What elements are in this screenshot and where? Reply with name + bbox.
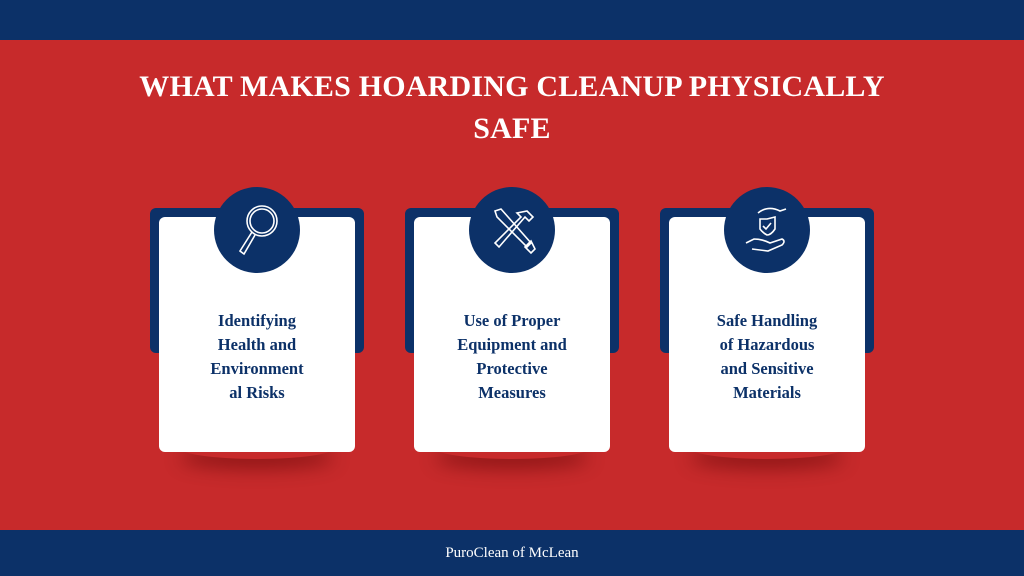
text: Health and [218, 335, 296, 354]
icon: magnifying glass [214, 187, 300, 273]
text: Safe Handling [717, 311, 817, 330]
text [457, 311, 567, 402]
icon: hands with shield [724, 187, 810, 273]
text: and Sensitive [720, 359, 814, 378]
card 2: equipment [405, 187, 619, 478]
text: Materials [733, 383, 801, 402]
icon: tools [469, 187, 555, 273]
text: Identifying [218, 311, 296, 330]
card 3: hazardous materials [660, 187, 874, 478]
text [717, 311, 818, 402]
text: Environment [210, 359, 304, 378]
text: Equipment and [457, 335, 567, 354]
text: of Hazardous [720, 335, 814, 354]
title: WHAT MAKES HOARDING CLEANUP PHYSICALLY SAFE [139, 70, 885, 145]
text: Protective [476, 359, 548, 378]
text: Measures [478, 383, 546, 402]
text: Use of Proper [464, 311, 560, 330]
text: al Risks [229, 383, 285, 402]
card 1: identifying risks [150, 187, 364, 478]
footer: PuroClean of McLean [445, 545, 579, 561]
text [210, 311, 304, 402]
footer [0, 530, 1024, 576]
top bar [0, 0, 1024, 40]
